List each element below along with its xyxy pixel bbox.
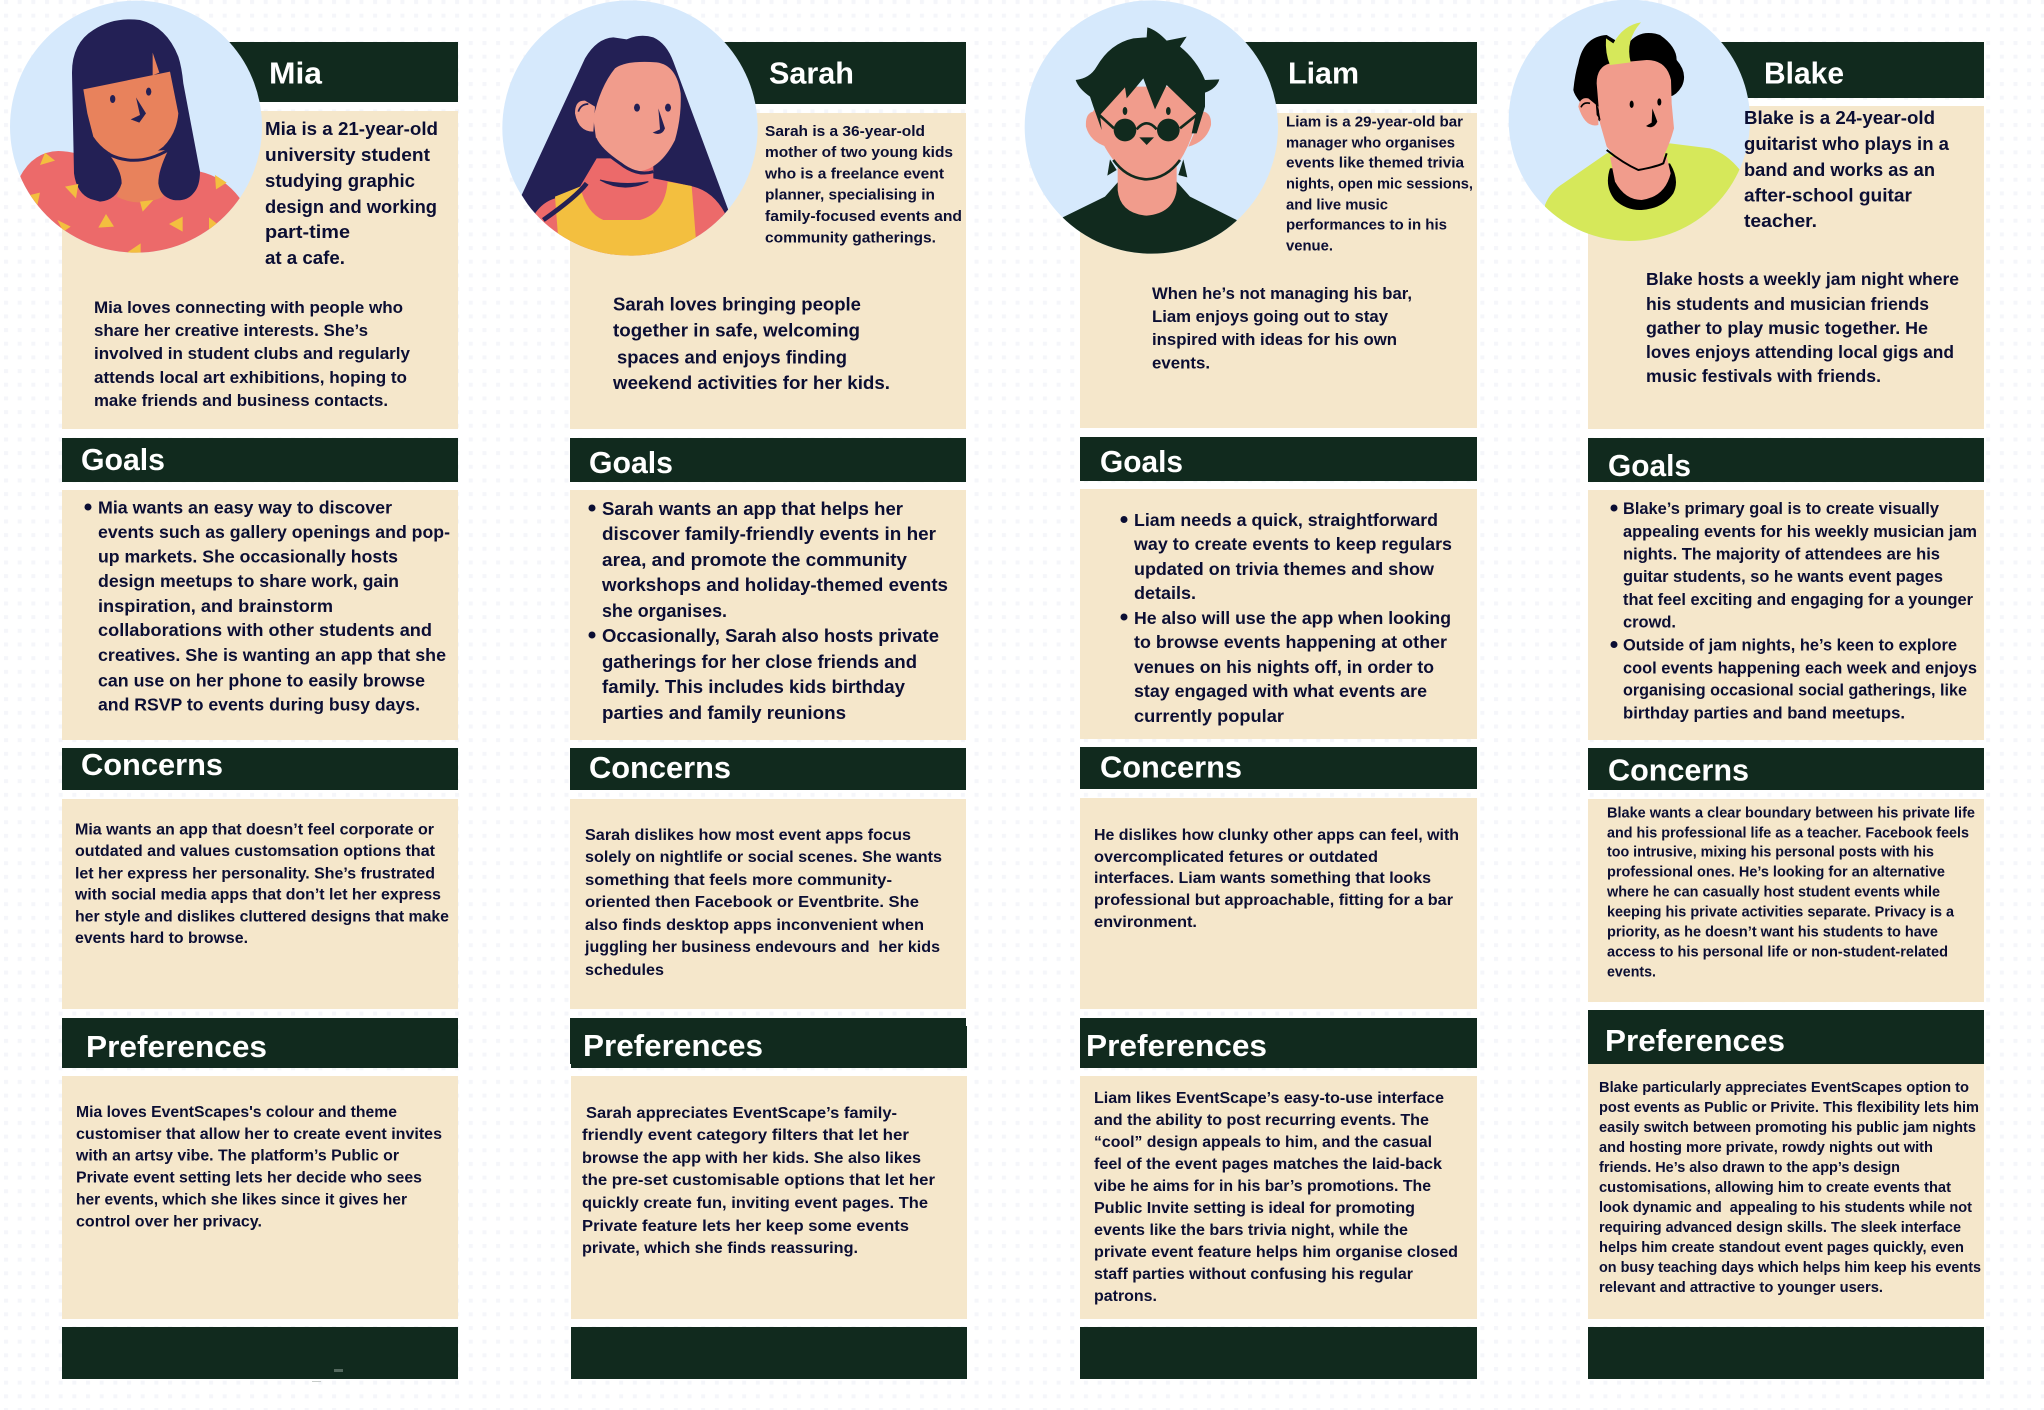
text: Sarah intro: Sarah is a 36-year-old bbox=[765, 123, 925, 140]
text: Sarah intro: planner, specialising in bbox=[765, 186, 935, 203]
heading: Preferences: Preferences bbox=[1605, 1023, 1785, 1058]
text: Mia intro: design and working bbox=[265, 196, 437, 217]
heading: Goals: Goals bbox=[81, 442, 165, 477]
panel: Mia goals: design meetups to share work, gain bbox=[98, 571, 399, 591]
panel: Blake goals: Blake’s primary goal is to create visually bbox=[1623, 500, 1939, 518]
panel: Sarah concerns: also finds desktop apps inconvenient when bbox=[585, 917, 924, 934]
heading: Goals bbox=[570, 438, 966, 482]
panel: Mia background bbox=[62, 111, 458, 429]
panel: Liam preferences: vibe he aims for in his bar’s promotions. The bbox=[1094, 1178, 1431, 1195]
heading: Goals bbox=[1080, 437, 1477, 481]
heading: Goals bbox=[1588, 438, 1984, 483]
panel: Blake goals: guitar students, so he wants event pages bbox=[1623, 568, 1943, 586]
panel: Mia preferences: with an artsy vibe. The platform’s Public or bbox=[75, 1148, 399, 1165]
panel: Mia concerns: Mia wants an app that doesn’t feel corporate or bbox=[75, 821, 434, 838]
name bar: Blake: Blake bbox=[1764, 56, 1844, 90]
text: Mia bio: involved in student clubs and regularly bbox=[94, 344, 411, 363]
panel: Liam concerns: environment. bbox=[1094, 914, 1197, 931]
panel: Mia concerns: her style and dislikes cluttered designs that make bbox=[75, 908, 449, 925]
panel: Liam concerns: interfaces. Liam wants something that looks bbox=[1094, 870, 1431, 887]
text: Blake bio: music festivals with friends. bbox=[1646, 366, 1881, 386]
text: Liam intro: performances to in his bbox=[1286, 218, 1447, 234]
heading: Preferences bbox=[62, 1018, 458, 1068]
panel: Blake preferences: look dynamic and appealing to his students while not bbox=[1599, 1200, 1972, 1216]
panel: Blake concerns: events. bbox=[1607, 964, 1656, 980]
panel: Sarah preferences: browse the app with her kids. She also likes bbox=[582, 1150, 921, 1167]
panel: Sarah goals: family. This includes kids birthday bbox=[602, 676, 906, 697]
panel: Liam preferences bbox=[1080, 1076, 1477, 1319]
panel: Liam goals: He also will use the app when looking bbox=[1134, 608, 1451, 628]
panel: Blake concerns: Blake wants a clear boundary between his private life bbox=[1607, 806, 1975, 822]
panel: Liam preferences: patrons. bbox=[1094, 1288, 1157, 1305]
panel: Mia goals: events such as gallery openings and pop- bbox=[98, 522, 450, 542]
panel: Sarah goals: she organises. bbox=[602, 600, 727, 621]
panel: Sarah preferences: Private feature lets her keep some events bbox=[582, 1218, 909, 1235]
panel: Sarah preferences: private, which she finds reassuring. bbox=[582, 1240, 858, 1257]
panel: Liam preferences: feel of the event pages matches the laid-back bbox=[1094, 1156, 1442, 1173]
text: Liam intro: Liam is a 29-year-old bar bbox=[1286, 115, 1463, 131]
text: Mia intro: university student bbox=[265, 144, 430, 165]
panel: Sarah goals: workshops and holiday-themed events bbox=[601, 574, 948, 595]
panel: Blake preferences: post events as Public or Privite. This flexibility lets him bbox=[1599, 1100, 1979, 1116]
text: Liam bio: inspired with ideas for his own bbox=[1152, 330, 1397, 349]
panel: Liam concerns: overcomplicated fetures or outdated bbox=[1094, 849, 1378, 866]
text: Liam intro: nights, open mic sessions, bbox=[1286, 177, 1473, 193]
panel: Blake preferences: and hosting more private, rowdy nights out with bbox=[1599, 1140, 1933, 1156]
panel: Blake preferences: on busy teaching days which helps him keep his events bbox=[1599, 1260, 1981, 1276]
text: Liam bio: When he’s not managing his bar, bbox=[1152, 284, 1412, 303]
text: Mia bio: share her creative interests. She’s bbox=[94, 321, 368, 340]
name bar: Sarah bbox=[570, 42, 966, 104]
panel: Blake goals: cool events happening each week and enjoys bbox=[1623, 659, 1977, 677]
text: Sarah intro: who is a freelance event bbox=[764, 165, 944, 182]
panel: Liam goals: updated on trivia themes and show bbox=[1134, 559, 1434, 579]
panel: Sarah concerns: schedules bbox=[585, 962, 664, 979]
panel: Mia concerns: outdated and values customsation options that bbox=[75, 843, 435, 860]
panel: Liam preferences: and the ability to post recurring events. The bbox=[1094, 1112, 1429, 1129]
heading: Concerns bbox=[570, 748, 966, 790]
panel: Sarah goals: gatherings for her close friends and bbox=[602, 651, 917, 672]
text: Blake intro: after-school guitar bbox=[1744, 185, 1912, 206]
name bar: Liam: Liam bbox=[1288, 56, 1359, 90]
panel: Liam preferences: Liam likes EventScape’s easy-to-use interface bbox=[1094, 1090, 1444, 1107]
panel: Sarah preferences: quickly create fun, inviting event pages. The bbox=[582, 1195, 928, 1212]
text: Blake intro: Blake is a 24-year-old bbox=[1744, 107, 1935, 128]
column: Sarah bbox=[502, 0, 967, 1379]
panel: Liam goals bbox=[1080, 489, 1477, 739]
panel: Mia preferences: customiser that allow her to create event invites bbox=[76, 1126, 442, 1143]
text: Sarah intro: family-focused events and bbox=[765, 208, 962, 225]
text: Mia intro bbox=[265, 118, 438, 268]
panel: Liam preferences: events like the bars trivia night, while the bbox=[1094, 1222, 1408, 1239]
text: Sarah bio: together in safe, welcoming bbox=[613, 320, 860, 341]
text: Mia bio bbox=[94, 298, 411, 410]
panel: Blake preferences bbox=[1588, 1064, 1984, 1319]
column: Liam bbox=[1025, 0, 1477, 1379]
panel: Blake preferences: friends. He’s also drawn to the app’s design bbox=[1599, 1160, 1900, 1176]
panel: Blake preferences: relevant and attractive to younger users. bbox=[1599, 1280, 1883, 1296]
text: Blake bio: loves enjoys attending local gigs and bbox=[1646, 342, 1954, 362]
heading: Concerns: Concerns bbox=[1608, 753, 1749, 788]
text: Sarah bio: Sarah loves bringing people bbox=[613, 294, 861, 315]
text: Sarah intro: mother of two young kids bbox=[765, 144, 953, 161]
heading: Preferences: Preferences bbox=[583, 1028, 763, 1063]
panel: Blake concerns: access to his personal life or non-student-related bbox=[1607, 944, 1948, 960]
panel: Sarah concerns bbox=[570, 799, 966, 1009]
panel: Liam goals: details. bbox=[1134, 583, 1196, 603]
heading: Concerns: Concerns bbox=[589, 750, 731, 785]
text: Blake intro: band and works as an bbox=[1744, 159, 1935, 180]
text: Blake intro: teacher. bbox=[1744, 210, 1817, 231]
panel: Sarah preferences: Sarah appreciates EventScape’s family- bbox=[586, 1105, 897, 1122]
panel: Sarah concerns: solely on nightlife or social scenes. She wants bbox=[585, 849, 942, 866]
text: Mia intro: part-time bbox=[265, 221, 350, 242]
heading: Preferences bbox=[1588, 1010, 1984, 1064]
panel: Sarah preferences: the pre-set customisable options that let her bbox=[582, 1172, 935, 1189]
panel: Liam goals: way to create events to keep regulars bbox=[1133, 534, 1452, 554]
text: Liam bio bbox=[1152, 284, 1412, 373]
heading: Concerns: Concerns bbox=[1100, 750, 1242, 785]
heading: Goals: Goals bbox=[1608, 448, 1691, 483]
panel: Mia preferences: Private event setting lets her decide who sees bbox=[76, 1170, 422, 1187]
text: Mia intro: at a cafe. bbox=[265, 247, 345, 268]
panel: Sarah goals: parties and family reunions bbox=[602, 702, 846, 723]
panel: Blake preferences: Blake particularly appreciates EventScapes option to bbox=[1599, 1080, 1969, 1096]
panel: Blake concerns: professional ones. He’s looking for an alternative bbox=[1607, 865, 1945, 881]
text: Liam intro bbox=[1286, 115, 1473, 254]
panel: Blake goals: that feel exciting and engaging for a younger bbox=[1623, 591, 1974, 609]
name bar: Liam bbox=[1080, 42, 1477, 104]
portrait: Liam bbox=[1025, 0, 1278, 260]
panel: Mia concerns: events hard to browse. bbox=[75, 930, 248, 947]
panel: Blake preferences: easily switch between promoting his public jam nights bbox=[1599, 1120, 1976, 1136]
panel: Sarah goals: Occasionally, Sarah also hosts private bbox=[602, 625, 939, 646]
panel: Mia goals bbox=[62, 490, 458, 740]
panel: Sarah background bbox=[570, 113, 966, 429]
text: Blake intro: guitarist who plays in a bbox=[1744, 133, 1950, 154]
panel: Sarah goals: discover family-friendly events in her bbox=[602, 523, 936, 544]
panel: Blake concerns bbox=[1588, 799, 1984, 1002]
panel: Sarah concerns: juggling her business endevours and her kids bbox=[584, 939, 940, 956]
heading: Preferences bbox=[1080, 1018, 1477, 1068]
panel: Mia goals: collaborations with other students and bbox=[98, 620, 432, 640]
panel: Sarah goals: Sarah wants an app that helps her bbox=[602, 498, 903, 519]
footer bar: Liam bbox=[1080, 1327, 1477, 1379]
name bar: Sarah: Sarah bbox=[769, 56, 854, 90]
portrait: Sarah bbox=[502, 0, 758, 263]
text: Liam bio: Liam enjoys going out to stay bbox=[1152, 307, 1389, 326]
panel: Blake goals: organising occasional social gatherings, like bbox=[1623, 682, 1967, 700]
heading: Concerns bbox=[1080, 747, 1477, 789]
panel: Liam goals: to browse events happening at other bbox=[1134, 632, 1447, 652]
panel: Mia goals: can use on her phone to easily browse bbox=[98, 671, 425, 691]
panel: Liam preferences: staff parties without confusing his regular bbox=[1094, 1266, 1413, 1283]
text: Mia intro: studying graphic bbox=[265, 170, 415, 191]
panel: Blake background bbox=[1588, 106, 1984, 429]
panel: Sarah preferences: friendly event category filters that let her bbox=[582, 1127, 909, 1144]
text: Sarah intro bbox=[764, 123, 962, 246]
name bar: Mia: Mia bbox=[269, 56, 323, 90]
panel: Blake preferences: requiring advanced design skills. The sleek interface bbox=[1599, 1220, 1961, 1236]
panel: Blake goals: Outside of jam nights, he’s keen to explore bbox=[1623, 636, 1957, 654]
text: Liam intro: manager who organises bbox=[1286, 136, 1455, 152]
footer bar: Mia bbox=[62, 1327, 458, 1382]
heading: Concerns bbox=[1588, 748, 1984, 790]
panel: Mia preferences: her events, which she likes since it gives her bbox=[76, 1192, 407, 1209]
name bar: Blake bbox=[1588, 42, 1984, 98]
text: Blake intro bbox=[1744, 107, 1950, 231]
text: Liam intro: events like themed trivia bbox=[1286, 156, 1465, 172]
panel: Sarah concerns: something that feels more community- bbox=[585, 872, 892, 889]
panel: Blake goals: crowd. bbox=[1623, 614, 1676, 632]
panel: Mia goals: up markets. She occasionally hosts bbox=[98, 546, 398, 566]
heading: Goals: Goals bbox=[589, 445, 673, 480]
panel: Liam goals: currently popular bbox=[1134, 706, 1284, 726]
text: Blake bio: Blake hosts a weekly jam night where bbox=[1646, 269, 1959, 289]
panel: Liam background bbox=[1080, 113, 1477, 428]
footer bar: Sarah bbox=[571, 1327, 967, 1379]
heading: Goals bbox=[62, 438, 458, 482]
name bar: Mia bbox=[62, 42, 458, 102]
panel: Mia preferences bbox=[62, 1076, 458, 1319]
text: Liam intro: venue. bbox=[1286, 238, 1333, 254]
panel: Liam preferences: private event feature helps him organise closed bbox=[1094, 1244, 1458, 1261]
panel: Blake concerns: too intrusive, mixing his personal posts with his bbox=[1607, 845, 1934, 861]
panel: Liam concerns bbox=[1080, 798, 1477, 1009]
portrait: Mia bbox=[10, 1, 262, 260]
panel: Liam preferences: “cool” design appeals to him, and the casual bbox=[1094, 1134, 1432, 1151]
panel: Liam goals: stay engaged with what events are bbox=[1134, 681, 1427, 701]
column: Blake bbox=[1509, 0, 1984, 1379]
heading: Preferences: Preferences bbox=[1086, 1028, 1267, 1063]
panel: Blake goals bbox=[1588, 490, 1984, 740]
panel: Mia goals: inspiration, and brainstorm bbox=[98, 596, 333, 616]
text: Sarah bio bbox=[612, 294, 890, 393]
panel: Liam concerns: professional but approachable, fitting for a bar bbox=[1094, 892, 1453, 909]
panel: Blake preferences: helps him create standout event pages quickly, even bbox=[1599, 1240, 1964, 1256]
panel: Blake goals: birthday parties and band meetups. bbox=[1623, 705, 1905, 723]
column: Mia bbox=[10, 1, 458, 1382]
heading: Concerns bbox=[62, 747, 458, 790]
panel: Blake goals: nights. The majority of attendees are his bbox=[1623, 545, 1940, 563]
panel: Blake preferences: customisations, allowing him to create events that bbox=[1599, 1180, 1951, 1196]
heading: Preferences: Preferences bbox=[86, 1029, 267, 1064]
text: Sarah bio: spaces and enjoys finding bbox=[617, 346, 847, 367]
text: Mia bio: Mia loves connecting with people who bbox=[94, 298, 403, 317]
panel: Sarah concerns: oriented then Facebook or Eventbrite. She bbox=[585, 894, 919, 911]
panel: Mia concerns: with social media apps that don’t let her express bbox=[74, 886, 441, 904]
panel: Sarah preferences bbox=[571, 1076, 967, 1319]
panel: Mia preferences: Mia loves EventScapes's colour and theme bbox=[76, 1104, 397, 1121]
text: Liam intro: and live music bbox=[1286, 197, 1388, 213]
text: Blake bio bbox=[1646, 269, 1959, 386]
text: Sarah bio: weekend activities for her kids. bbox=[612, 372, 890, 393]
footer bar: Blake bbox=[1588, 1327, 1984, 1379]
panel: Liam goals: Liam needs a quick, straightforward bbox=[1134, 510, 1438, 530]
panel: Blake concerns: keeping his private activities separate. Privacy is a bbox=[1607, 904, 1955, 920]
text: Blake bio: his students and musician friends bbox=[1646, 294, 1929, 314]
text: Mia bio: make friends and business contacts. bbox=[94, 391, 388, 410]
heading: Goals: Goals bbox=[1100, 444, 1183, 479]
text: Sarah intro: community gatherings. bbox=[765, 229, 936, 246]
panel: Sarah goals: area, and promote the community bbox=[602, 549, 908, 570]
panel: Mia concerns: let her express her personality. She’s frustrated bbox=[75, 866, 435, 882]
portrait: Blake bbox=[1509, 0, 1750, 243]
panel: Blake goals: appealing events for his weekly musician jam bbox=[1623, 523, 1977, 541]
panel: Mia goals: creatives. She is wanting an app that she bbox=[98, 645, 446, 665]
text: Mia bio: attends local art exhibitions, hoping to bbox=[94, 368, 407, 387]
panel: Blake concerns: priority, as he doesn’t want his students to have bbox=[1607, 924, 1938, 940]
panel: Mia concerns bbox=[62, 799, 458, 1009]
heading: Preferences bbox=[570, 1018, 967, 1068]
text: Liam bio: events. bbox=[1152, 354, 1210, 373]
panel: Liam goals: venues on his nights off, in order to bbox=[1134, 657, 1434, 677]
panel: Blake concerns: where he can casually host student events while bbox=[1606, 884, 1940, 900]
panel: Liam preferences: Public Invite setting is ideal for promoting bbox=[1094, 1200, 1415, 1217]
panel: Blake concerns: and his professional life as a teacher. Facebook feels bbox=[1607, 825, 1969, 841]
panel: Liam concerns: He dislikes how clunky other apps can feel, with bbox=[1094, 827, 1459, 844]
panel: Mia goals: and RSVP to events during busy days. bbox=[98, 695, 420, 715]
heading: Concerns: Concerns bbox=[81, 747, 223, 782]
panel: Sarah concerns: Sarah dislikes how most event apps focus bbox=[585, 827, 911, 844]
panel: Mia preferences: control over her privacy. bbox=[76, 1214, 262, 1231]
panel: Mia goals: Mia wants an easy way to discover bbox=[98, 498, 392, 518]
text: Blake bio: gather to play music together. He bbox=[1646, 318, 1928, 338]
panel: Sarah goals bbox=[570, 490, 966, 740]
text: Mia intro: Mia is a 21-year-old bbox=[265, 118, 438, 139]
